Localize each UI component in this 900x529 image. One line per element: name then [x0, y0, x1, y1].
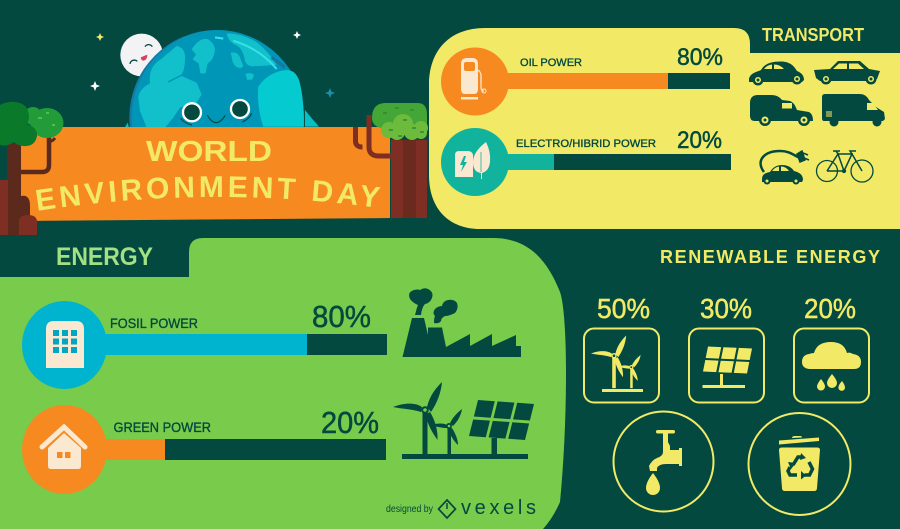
rain energy card — [794, 293, 869, 402]
moon — [120, 34, 163, 76]
icon: wind turbines and solar panel — [393, 382, 534, 459]
icon: delivery van — [822, 94, 885, 126]
fossil power row — [22, 299, 387, 389]
oil power row: 80% — [677, 44, 723, 71]
electro/hybrid power row: 20% — [677, 127, 722, 154]
heading: renewable energy: RENEWABLE ENERGY — [660, 247, 880, 267]
icon: fuel pump — [461, 58, 486, 100]
icon: house — [42, 427, 85, 469]
hero: earth and banner — [0, 30, 428, 235]
credit: designed by vexels — [386, 497, 536, 519]
panel: energy — [0, 238, 566, 529]
solar energy card — [689, 293, 764, 402]
oil power row — [441, 44, 730, 116]
heading: transport: TRANSPORT — [762, 25, 864, 45]
eyes and smile — [181, 100, 252, 125]
icon: recycle bin — [779, 436, 820, 491]
icon: solar panel — [702, 346, 752, 388]
panel: transport — [429, 25, 900, 229]
icon: bicycle — [816, 151, 873, 182]
rain energy card: 20% — [804, 293, 856, 324]
icon: wind turbines — [591, 336, 643, 392]
wind energy card — [584, 293, 659, 402]
right tree — [356, 103, 428, 218]
banner — [15, 127, 390, 221]
banner title: ENVIRONMENT DAY — [36, 176, 380, 211]
solar energy card: 30% — [700, 293, 752, 324]
icon: building — [46, 321, 84, 368]
icon: beetle car — [749, 62, 804, 86]
oil power row: OIL POWER — [520, 57, 582, 69]
fossil power row: 80% — [312, 299, 371, 334]
banner title: WORLD — [146, 136, 272, 168]
green power row: GREEN POWER — [114, 419, 211, 435]
icon: battery and leaf — [455, 142, 490, 179]
icon: rain cloud — [802, 342, 861, 391]
stars — [90, 31, 335, 98]
water tap badge — [614, 412, 714, 512]
icon: factory — [402, 288, 521, 357]
recycling bin badge — [748, 413, 850, 515]
icon: sedan car — [814, 61, 880, 84]
wind energy card: 50% — [597, 293, 650, 324]
green power row — [22, 405, 386, 494]
fossil power row: FOSIL POWER — [110, 315, 198, 331]
electro/hybrid power row: ELECTRO/HIBRID POWER — [516, 138, 656, 150]
left tree — [0, 102, 64, 235]
banner title — [36, 136, 380, 211]
electro/hybrid power row — [441, 127, 731, 196]
earth — [125, 30, 319, 205]
icon: electric car with plug — [761, 151, 809, 184]
credit: designed by vexels: designed by — [386, 503, 434, 515]
icon: tap with drop — [646, 430, 682, 495]
icon: rounded van — [750, 95, 813, 126]
green power row: 20% — [321, 405, 379, 440]
heading: energy: ENERGY — [56, 243, 153, 271]
credit: designed by vexels: vexels — [461, 497, 536, 519]
